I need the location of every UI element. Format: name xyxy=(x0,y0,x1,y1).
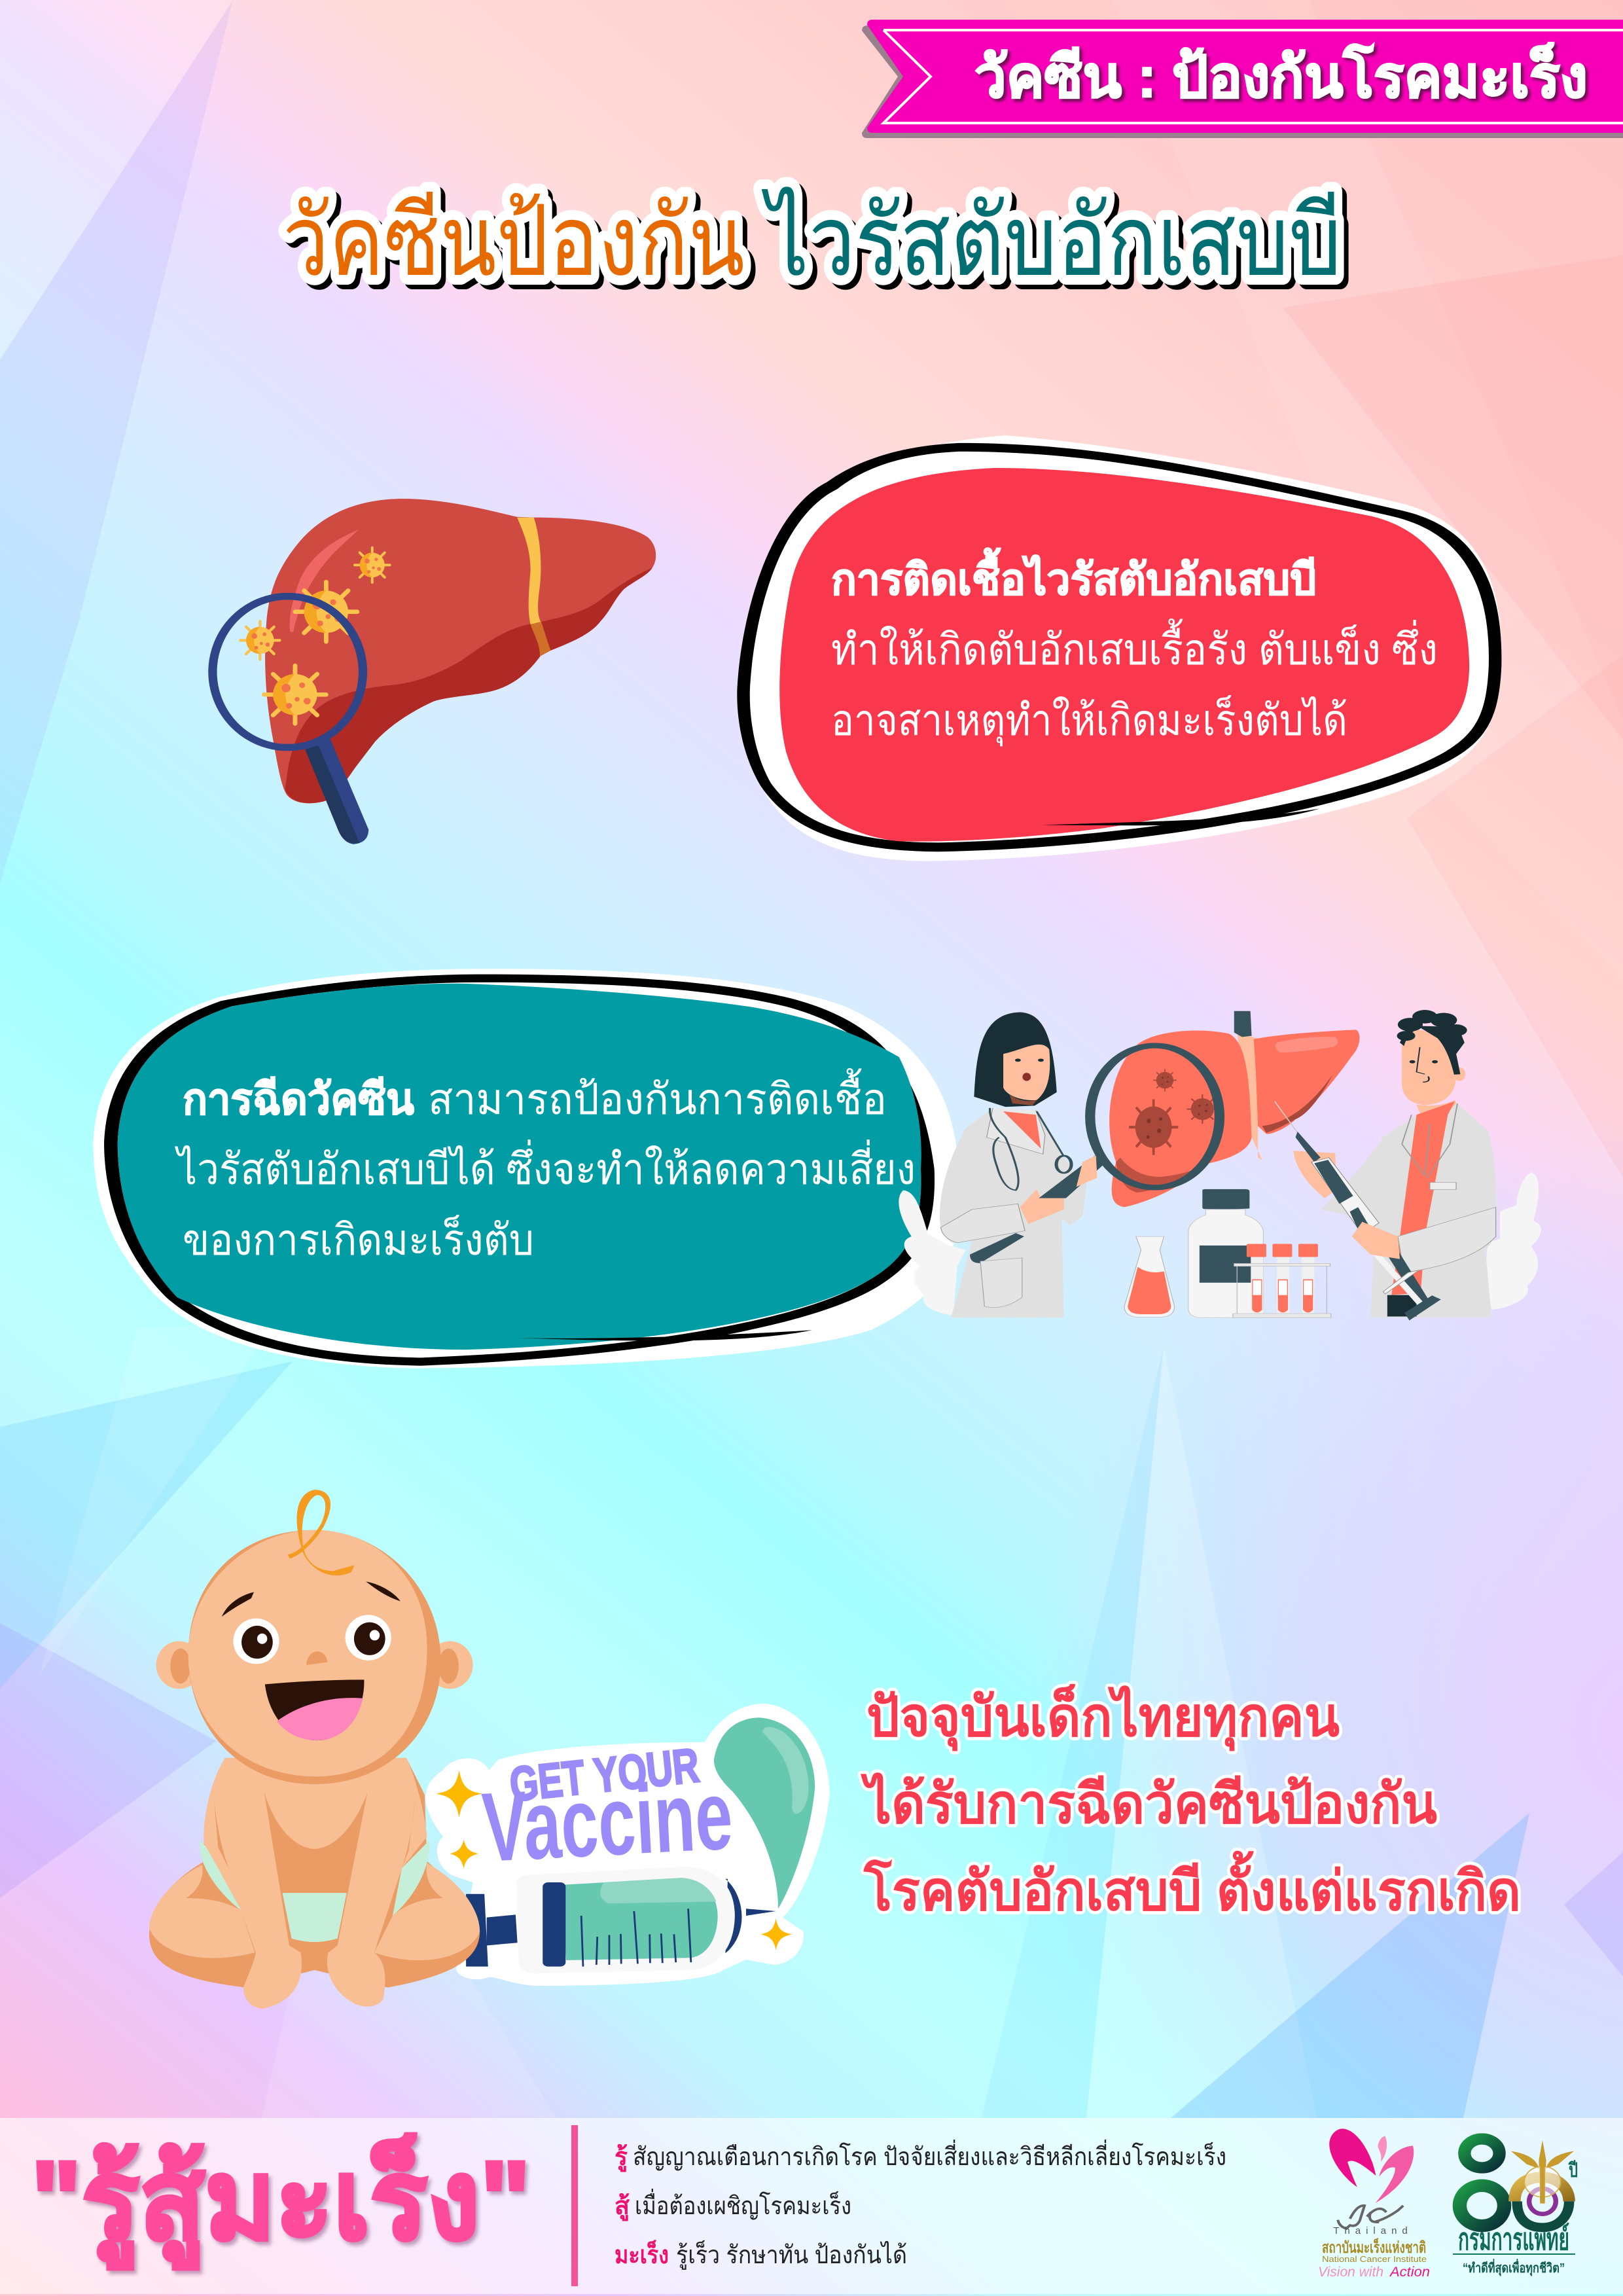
logo: National Cancer Institute: Vision with xyxy=(1318,2265,1383,2280)
footer line 3 xyxy=(615,2240,907,2270)
logo: National Cancer Institute: Action xyxy=(1389,2265,1430,2280)
logo: National Cancer Institute: Thailand xyxy=(1333,2225,1413,2236)
campaign slogan: "รู้สู้มะเร็ง" xyxy=(31,2134,531,2269)
woman doctor xyxy=(940,1012,1103,1318)
title part: hepatitis B virus: ไวรัสตับอักเสบบี xyxy=(762,186,1342,296)
sticker text: get your: GET YOUR xyxy=(507,1738,702,1812)
plants xyxy=(899,1172,1541,1316)
banner: category ribbon xyxy=(862,20,1623,138)
speech bubble: hepatitis B infection xyxy=(737,435,1501,861)
bubble text line 3: อาจสาเหตุทำให้เกิดมะเร็งตับได้ xyxy=(831,694,1347,747)
bubble text line 2: ทำให้เกิดตับอักเสบเรื้อรัง ตับแข็ง ซึ่ง xyxy=(831,619,1438,673)
main title xyxy=(283,186,1342,296)
bubble text line 1 bold: การฉีดวัคซีน xyxy=(183,1075,414,1123)
statement line 1: ปัจจุบันเด็กไทยทุกคน xyxy=(866,1683,1340,1751)
sticker artwork xyxy=(425,1704,830,1986)
bubble text heading: การติดเชื้อไวรัสตับอักเสบบี xyxy=(831,547,1317,603)
footer line 2: สู้ xyxy=(615,2193,630,2221)
man doctor xyxy=(1275,1010,1497,1318)
medicine bottle xyxy=(1188,1189,1263,1318)
test tubes xyxy=(1233,1244,1331,1318)
title part: vaccine prevention: วัคซีนป้องกัน xyxy=(283,186,745,296)
logo: Department of Medical Services 80 years: ปี xyxy=(1568,2160,1578,2181)
statement line 2: ได้รับการฉีดวัคซีนป้องกัน xyxy=(860,1772,1437,1835)
divider bar xyxy=(571,2125,578,2286)
footer line 1: สัญญาณเตือนการเกิดโรค ปัจจัยเสี่ยงและวิธีหลีกเลี่ยงโรคมะเร็ง xyxy=(633,2140,1226,2171)
illustration: liver with virus under magnifier xyxy=(213,499,656,844)
bubble shape xyxy=(93,969,959,1369)
footer line 3: รู้เร็ว รักษาทัน ป้องกันได้ xyxy=(676,2240,907,2270)
illustration: happy baby xyxy=(149,1490,480,2009)
illustration: doctors examining liver xyxy=(899,1010,1541,1318)
flask xyxy=(1124,1236,1175,1317)
sticker: get your vaccine xyxy=(425,1704,830,1986)
logo: National Cancer Institute xyxy=(1318,2128,1430,2280)
logo: National Cancer Institute: National Cancer Institute xyxy=(1322,2254,1427,2264)
baby head xyxy=(188,1490,441,1784)
logo: National Cancer Institute: สถาบันมะเร็งแห่งชาติ xyxy=(1322,2238,1426,2257)
bubble text line 1 regular: สามารถป้องกันการติดเชื้อ xyxy=(428,1068,887,1123)
footer band xyxy=(0,2118,1623,2294)
logo: Department of Medical Services 80 years: “ทำดีที่สุดเพื่อทุกชีวิต” xyxy=(1463,2258,1565,2276)
statement line 3: โรคตับอักเสบบี ตั้งแต่แรกเกิด xyxy=(863,1850,1521,1922)
bubble text line 3: ของการเกิดมะเร็งตับ xyxy=(183,1214,534,1264)
logo: Department of Medical Services 80 years xyxy=(1453,2139,1578,2276)
bubble text line 2: ไวรัสตับอักเสบบีได้ ซึ่งจะทำให้ลดความเสี่ยง xyxy=(174,1139,916,1193)
footer line 2: เมื่อต้องเผชิญโรคมะเร็ง xyxy=(635,2189,851,2220)
statement: Thai children get vaccine from birth xyxy=(860,1683,1521,1922)
speech bubble: vaccination xyxy=(93,969,959,1369)
footer line 2 xyxy=(615,2189,851,2221)
footer line 3: มะเร็ง xyxy=(615,2240,669,2269)
baby ears xyxy=(156,1641,473,1689)
sticker text: vaccine: Vaccine xyxy=(480,1759,735,1882)
banner title text: วัคซีน : ป้องกันโรคมะเร็ง xyxy=(974,42,1588,109)
footer line 1: รู้ xyxy=(615,2144,628,2172)
bubble shape xyxy=(737,435,1501,861)
central liver with magnifier xyxy=(1090,1011,1360,1207)
